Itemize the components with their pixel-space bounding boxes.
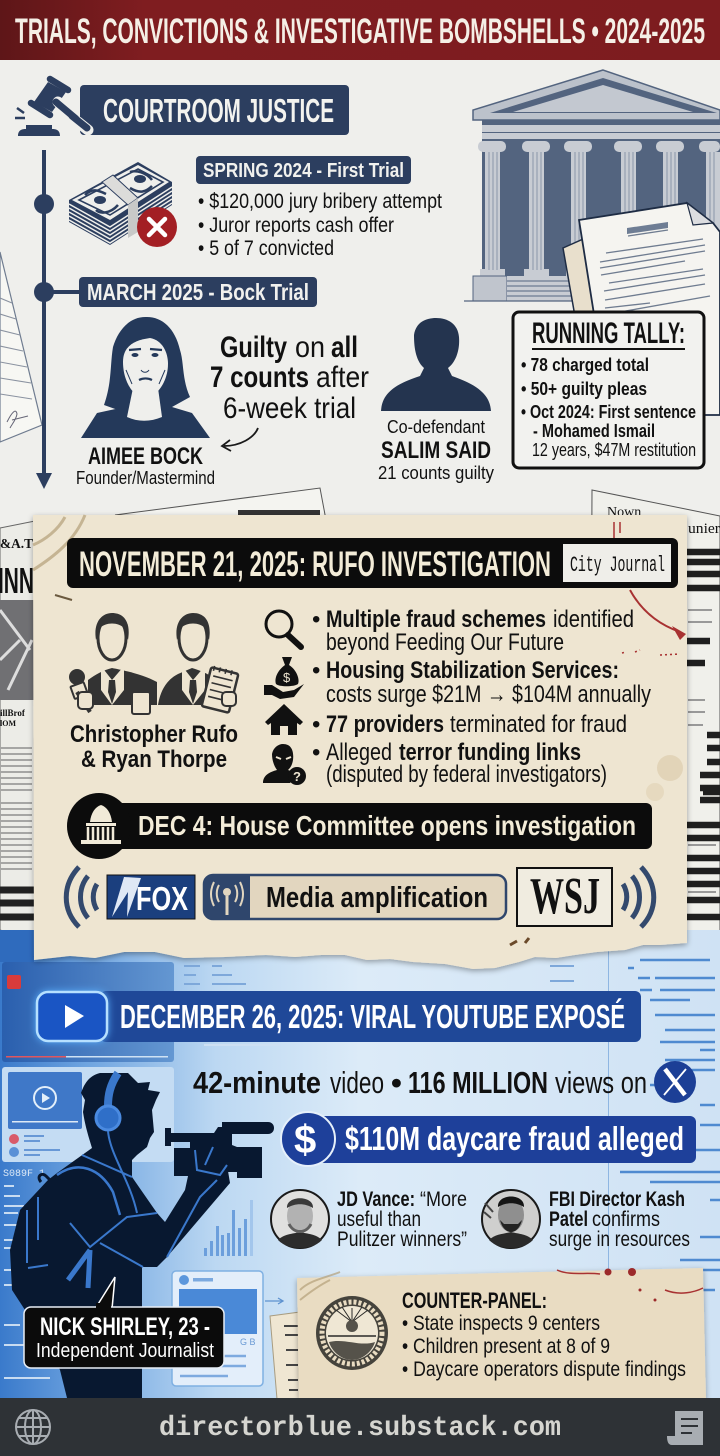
panel: counter-panel: • Children present at 8 of 9 (402, 1335, 610, 1358)
illustration: signed paper at left (0, 252, 42, 442)
icon: stack of cash with red X (69, 162, 177, 247)
label: Aimee Bock: Founder/Mastermind (76, 468, 215, 488)
bullet: providers terminated: terminated for fraud (450, 711, 627, 738)
blue video section background (0, 930, 720, 1400)
footer: directorblue.substack.com (159, 1413, 561, 1444)
bullet: providers terminated (312, 711, 627, 738)
quote: JD Vance: “More (420, 1188, 467, 1211)
icon: money bag in hand (264, 657, 304, 699)
panel: running tally: • 78 charged total (521, 355, 649, 375)
label: Salim Said: 21 counts guilty (378, 463, 494, 483)
banner: $110M daycare fraud (281, 1112, 696, 1166)
panel: running tally (513, 312, 704, 468)
icon: money bag in hand: $ (283, 670, 291, 685)
background newspapers: &A.T (0, 537, 34, 552)
heading: courtroom justice: COURTROOM JUSTICE (103, 92, 334, 129)
banner: House Committee (67, 793, 652, 859)
portrait: Kash Patel (482, 1190, 540, 1248)
bullet: housing stabilization (312, 657, 651, 708)
verdict text: 7 counts (210, 361, 309, 394)
pill: media amplification: Media amplification (266, 882, 488, 914)
bullet: providers terminated: 77 providers (326, 711, 444, 738)
label: Salim Said (378, 417, 494, 483)
label: Christopher Rufo and Ryan Thorpe: Christopher Rufo (70, 721, 238, 748)
spring 2024 entry: SPRING 2024 - First Trial (203, 160, 404, 182)
illustration: legal documents (563, 203, 720, 415)
stat line: 116 million views: views on (555, 1065, 647, 1100)
verdict text: 6-week trial (223, 392, 356, 425)
bullet: housing stabilization: costs surge $21M → $104M annually (326, 681, 651, 708)
background newspapers: unier (688, 521, 720, 537)
icon: two reporters (69, 613, 239, 714)
stat line: 116 million views (193, 1061, 696, 1103)
reporter one (69, 613, 157, 714)
quote: JD Vance: useful than (337, 1208, 421, 1231)
label: Salim Said: SALIM SAID (381, 437, 491, 464)
label: Christopher Rufo and Ryan Thorpe: & Ryan Thorpe (81, 746, 227, 773)
panel: counter-panel (297, 1268, 706, 1399)
bullet: fraud schemes: Multiple fraud schemes (326, 606, 546, 633)
icon: gavel (15, 79, 87, 136)
bullet: housing stabilization: Housing Stabilization Services: (326, 657, 619, 684)
silhouette: Nick Shirley with camera (10, 1073, 274, 1398)
blue video section background: G B (240, 1337, 256, 1347)
text: Kash Patel (549, 1188, 690, 1251)
paper behind counter-panel (270, 1312, 300, 1399)
icon: globe (16, 1410, 50, 1444)
logo: WSJ: WSJ (530, 868, 600, 925)
blue video section background: S089F 1 (3, 1169, 45, 1180)
label: Salim Said: Co-defendant (387, 417, 485, 437)
logo: Fox: FOX (136, 880, 188, 917)
panel: running tally: - Mohamed Ismail (533, 421, 655, 441)
spring 2024 entry: • $120,000 jury bribery attempt (198, 190, 442, 213)
callout: Nick Shirley (24, 1277, 224, 1368)
silhouette: Salim Said (381, 318, 491, 411)
verdict text: all (331, 331, 358, 364)
timeline with nodes and arrow (34, 150, 80, 489)
bullet: fraud schemes: identified (553, 606, 634, 633)
bullet: terror funding links: terror funding links (399, 739, 581, 766)
heading: courtroom justice (72, 85, 349, 135)
header banner (0, 0, 720, 60)
icon: glowing play button (36, 991, 108, 1042)
logo: Fox (107, 875, 195, 919)
icon: masked figure with question mark (263, 744, 306, 785)
icon: capitol dome (81, 800, 121, 844)
icon: antenna (211, 882, 243, 915)
text: Kash Patel: Patel (549, 1208, 588, 1231)
portrait: Aimee Bock (81, 317, 210, 438)
callout: Nick Shirley: Independent Journalist (36, 1340, 214, 1362)
icon: X logo (654, 1061, 696, 1103)
verdict text: after (316, 361, 369, 394)
seal of Minnesota (316, 1296, 388, 1370)
label: Aimee Bock (76, 443, 215, 488)
background newspapers: illBrof (0, 708, 26, 718)
quote: JD Vance: Pulitzer winners” (337, 1228, 467, 1251)
quote: JD Vance: JD Vance: (337, 1188, 415, 1211)
footer (0, 1398, 720, 1456)
panel: counter-panel: • State inspects 9 centers (402, 1312, 600, 1335)
panel: counter-panel: COUNTER-PANEL: (402, 1288, 547, 1313)
verdict text: Guilty (220, 331, 287, 364)
text: Kash Patel: confirms (592, 1208, 660, 1231)
stat line: 116 million views: 42-minute (193, 1065, 321, 1100)
icon: masked figure with question mark: ? (293, 769, 301, 784)
background newspapers (0, 488, 720, 955)
text: Kash Patel: surge in resources (549, 1228, 690, 1251)
icon: house (265, 704, 303, 735)
bullet: terror funding links (312, 739, 607, 788)
bullet: housing stabilization: • (312, 657, 320, 684)
background newspapers: Nown (607, 505, 641, 520)
logo: WSJ (517, 868, 612, 926)
icon: broadcast waves right (623, 867, 654, 927)
stat line: 116 million views: 116 MILLION (408, 1065, 548, 1100)
panel: running tally: • 50+ guilty pleas (521, 379, 647, 399)
icon: magnifier (266, 611, 301, 647)
spring 2024 entry (196, 156, 442, 260)
portrait: JD Vance (271, 1190, 329, 1248)
reporter two (158, 613, 239, 713)
label: Christopher Rufo and Ryan Thorpe (70, 721, 238, 773)
arrow to Bock (222, 428, 258, 451)
icon: document scroll (667, 1411, 703, 1445)
march 2025 label: MARCH 2025 - Bock Trial (87, 279, 309, 305)
bullet: providers terminated: • (312, 711, 320, 738)
panel: Rufo investigation (33, 515, 687, 969)
verdict text (210, 331, 369, 425)
bullet: fraud schemes (312, 606, 634, 656)
bullet: terror funding links: (disputed by federal investigators) (326, 761, 607, 788)
spring 2024 entry: • Juror reports cash offer (198, 214, 394, 237)
quote: JD Vance (337, 1188, 467, 1251)
callout: Nick Shirley: NICK SHIRLEY, 23 - (40, 1313, 210, 1341)
stat line: 116 million views: • (391, 1065, 402, 1100)
banner: $110M daycare fraud: $ (294, 1118, 316, 1162)
bullet: terror funding links: • (312, 739, 320, 766)
verdict text: on (295, 331, 325, 364)
bullet: fraud schemes: beyond Feeding Our Future (326, 629, 564, 656)
spring 2024 entry: • 5 of 7 convicted (198, 237, 334, 260)
background newspapers: lOM (0, 719, 16, 728)
illustration: courthouse (464, 70, 720, 301)
bullet: terror funding links: Alleged (326, 739, 392, 766)
icon: broadcast waves left (66, 867, 97, 927)
pill: media amplification (204, 875, 506, 919)
bullet: fraud schemes: • (312, 606, 320, 633)
label: Aimee Bock: AIMEE BOCK (88, 443, 203, 470)
banner: viral YouTube expose (36, 991, 641, 1042)
stat line: 116 million views: video (330, 1065, 384, 1100)
